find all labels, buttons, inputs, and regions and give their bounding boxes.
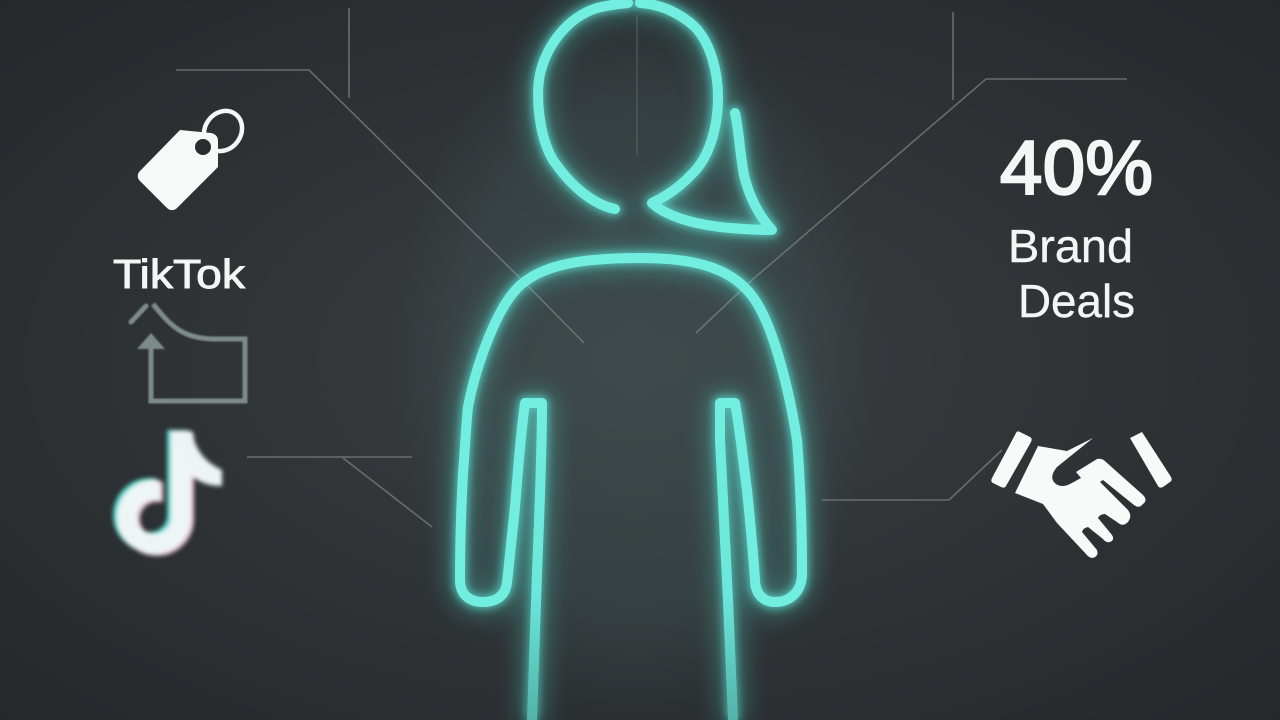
figure tint — [395, 0, 875, 720]
label: Brand: Brand — [1008, 220, 1133, 272]
inner glow — [460, 3, 802, 716]
icon: price tag — [138, 103, 250, 210]
left cuff — [991, 431, 1032, 488]
stat: 40% Brand Deals — [1000, 126, 1153, 327]
icon: TikTok logo — [123, 430, 222, 546]
icon: handshake — [991, 431, 1172, 558]
right cuff — [1130, 432, 1172, 488]
label: Deals: Deals — [1018, 275, 1135, 327]
connector lines — [176, 8, 1127, 527]
head outline — [538, 3, 628, 209]
body outline — [460, 258, 802, 602]
wide glow — [460, 3, 802, 716]
clasped hands — [1015, 438, 1146, 558]
legs — [532, 403, 733, 720]
value: 40%: 40% — [1000, 126, 1153, 211]
neon figure — [460, 3, 802, 720]
label: TikTok: TikTok — [113, 251, 246, 297]
icon: growth arrow chart — [131, 304, 245, 401]
ponytail and head right side — [640, 3, 772, 230]
